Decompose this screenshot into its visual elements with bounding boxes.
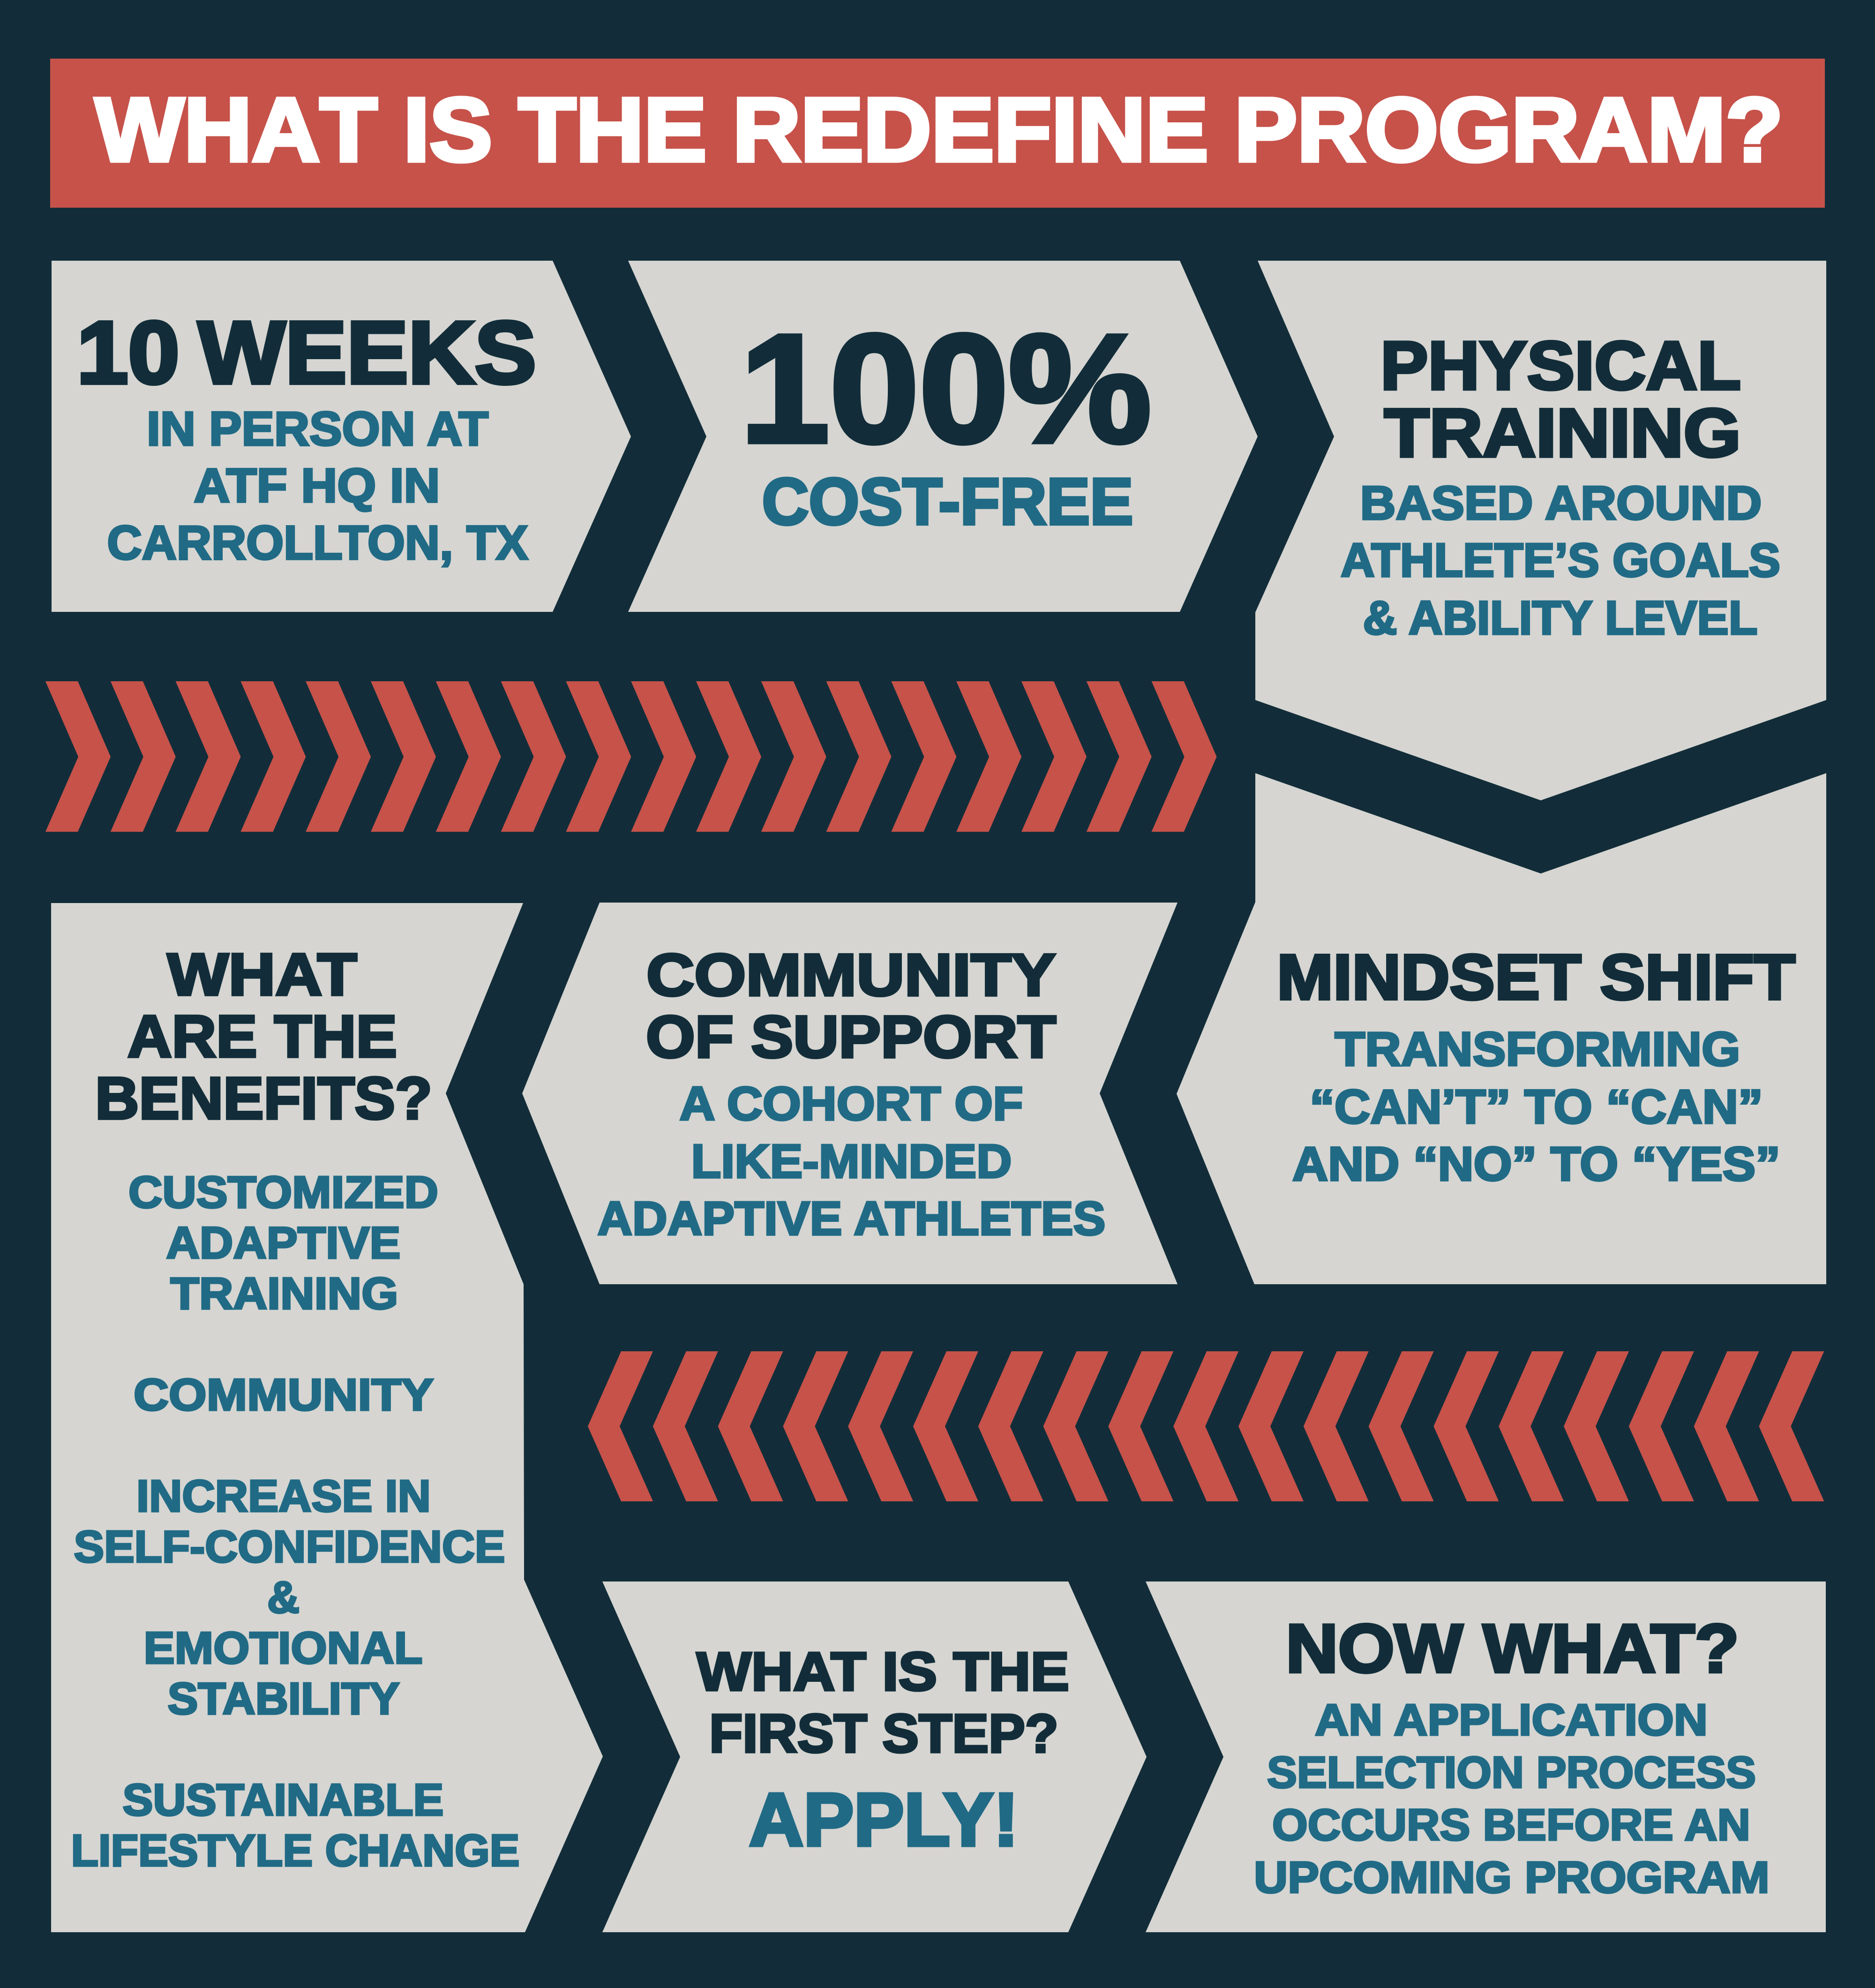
text: physical training description: BASED AROUND bbox=[1360, 477, 1762, 530]
heading: now what: NOW WHAT? bbox=[1286, 1610, 1739, 1687]
text: in person location bbox=[107, 401, 528, 569]
heading: physical training: PHYSICAL bbox=[1380, 327, 1741, 404]
text: community description: A COHORT OF bbox=[680, 1077, 1023, 1130]
heading: what are the benefits: BENEFITS? bbox=[95, 1065, 432, 1131]
text: benefit customized adaptive training bbox=[128, 1167, 438, 1318]
text: community description: LIKE-MINDED bbox=[691, 1136, 1012, 1188]
title text: WHAT IS THE REDEFINE PROGRAM? bbox=[95, 79, 1783, 180]
text: physical training description: ATHLETE’S GOALS bbox=[1341, 535, 1780, 587]
arrow strip: red chevrons pointing right bbox=[45, 681, 1217, 832]
text: apply: APPLY! bbox=[749, 1777, 1019, 1861]
text: benefit self-confidence and emotional stability: EMOTIONAL bbox=[143, 1623, 423, 1673]
text: application process description: UPCOMING PROGRAM bbox=[1254, 1853, 1770, 1902]
text: benefit self-confidence and emotional stability bbox=[74, 1471, 505, 1724]
text: benefit self-confidence and emotional stability: INCREASE IN bbox=[136, 1471, 431, 1521]
heading: what is the first step: WHAT IS THE bbox=[697, 1641, 1069, 1702]
arrow strip: red chevrons pointing left bbox=[588, 1351, 1824, 1501]
panel: 100% cost-free bbox=[628, 261, 1258, 612]
text: mindset description: AND “NO” TO “YES” bbox=[1292, 1137, 1780, 1191]
text: benefit self-confidence and emotional stability: STABILITY bbox=[168, 1674, 399, 1724]
heading: 10 weeks: 10 WEEKS bbox=[77, 303, 536, 402]
text: benefit sustainable lifestyle change: LIFESTYLE CHANGE bbox=[71, 1826, 519, 1875]
text: mindset description: “CAN’T” TO “CAN” bbox=[1310, 1079, 1763, 1134]
text: community description: ADAPTIVE ATHLETES bbox=[597, 1193, 1105, 1245]
title banner bbox=[50, 59, 1825, 208]
heading: what is the first step bbox=[697, 1641, 1069, 1764]
text: application process description: SELECTION PROCESS bbox=[1267, 1748, 1756, 1797]
text: benefit customized adaptive training: CUSTOMIZED bbox=[128, 1167, 438, 1217]
text: application process description bbox=[1254, 1695, 1770, 1902]
heading: physical training bbox=[1380, 327, 1741, 471]
text: benefit sustainable lifestyle change bbox=[71, 1775, 519, 1875]
text: physical training description: & ABILITY LEVEL bbox=[1363, 592, 1758, 644]
text: in person location: IN PERSON AT bbox=[147, 401, 488, 456]
text: application process description: AN APPLICATION bbox=[1315, 1695, 1708, 1744]
panel: 10 weeks bbox=[52, 261, 631, 612]
panel: mindset shift bbox=[1177, 773, 1826, 1284]
text: physical training description bbox=[1341, 477, 1780, 644]
panel: what are the benefits bbox=[51, 903, 603, 1932]
heading: 100%: 100% bbox=[740, 302, 1151, 474]
text: in person location: ATF HQ IN bbox=[194, 459, 440, 512]
heading: community of support: COMMUNITY bbox=[646, 941, 1056, 1008]
text: in person location: CARROLLTON, TX bbox=[107, 516, 528, 569]
text: benefit customized adaptive training: ADAPTIVE bbox=[166, 1218, 400, 1268]
panel: what is the first step bbox=[602, 1581, 1147, 1932]
text: mindset description bbox=[1292, 1022, 1780, 1191]
text: benefit community: COMMUNITY bbox=[134, 1370, 434, 1420]
heading: what is the first step: FIRST STEP? bbox=[709, 1703, 1058, 1764]
text: application process description: OCCURS BEFORE AN bbox=[1272, 1800, 1750, 1849]
text: benefit customized adaptive training: TRAINING bbox=[171, 1269, 398, 1318]
text: community description bbox=[597, 1077, 1105, 1245]
text: benefit sustainable lifestyle change: SUSTAINABLE bbox=[123, 1775, 443, 1825]
text: mindset description: TRANSFORMING bbox=[1335, 1022, 1740, 1076]
text: cost-free: COST-FREE bbox=[762, 465, 1133, 538]
heading: mindset shift: MINDSET SHIFT bbox=[1277, 941, 1795, 1013]
heading: what are the benefits bbox=[95, 941, 432, 1131]
heading: community of support bbox=[646, 941, 1056, 1070]
heading: community of support: OF SUPPORT bbox=[646, 1003, 1056, 1070]
text: benefit self-confidence and emotional stability: SELF-CONFIDENCE bbox=[74, 1522, 505, 1572]
text: benefit self-confidence and emotional stability: & bbox=[267, 1573, 300, 1622]
panel: community of support bbox=[522, 903, 1178, 1284]
heading: what are the benefits: ARE THE bbox=[128, 1003, 397, 1069]
panel: now what bbox=[1146, 1581, 1826, 1932]
heading: what are the benefits: WHAT bbox=[167, 941, 357, 1008]
heading: physical training: TRAINING bbox=[1384, 395, 1741, 471]
panel: physical training bbox=[1255, 261, 1826, 800]
